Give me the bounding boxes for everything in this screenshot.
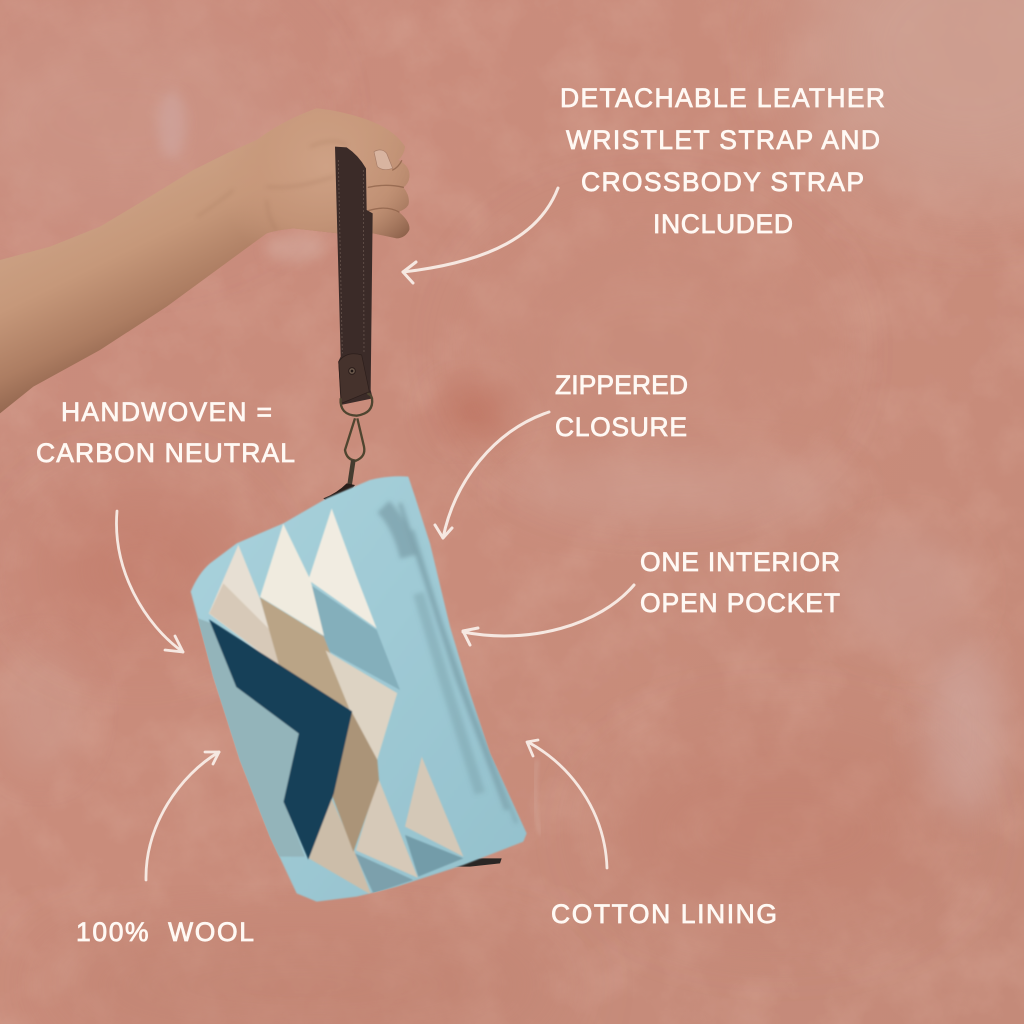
arrow: zippered closure <box>435 412 549 538</box>
arrow: wool <box>146 752 219 880</box>
label: handwoven carbon neutral: HANDWOVEN = <box>61 397 272 427</box>
label: detachable strap: DETACHABLE LEATHER <box>560 83 885 113</box>
metal clasp <box>341 394 372 487</box>
label: handwoven carbon neutral <box>36 397 295 468</box>
label: handwoven carbon neutral: CARBON NEUTRAL <box>36 438 295 468</box>
fingers <box>368 161 403 212</box>
side seam stripes <box>383 503 517 823</box>
label: zippered closure <box>555 370 688 442</box>
arrow: cotton lining <box>527 740 607 868</box>
label: detachable strap <box>560 83 885 239</box>
label: detachable strap: CROSSBODY STRAP <box>581 167 864 197</box>
label: zippered closure: ZIPPERED <box>555 370 688 400</box>
arrow: interior pocket <box>463 585 634 645</box>
label: cotton lining: COTTON LINING <box>551 899 777 929</box>
leather wrist strap <box>335 147 373 405</box>
label: detachable strap: INCLUDED <box>653 209 793 239</box>
label: interior pocket <box>640 547 840 618</box>
label: zippered closure: CLOSURE <box>555 412 687 442</box>
label: wool: 100% WOOL <box>76 917 254 947</box>
label: detachable strap: WRISTLET STRAP AND <box>566 125 880 155</box>
arrow: handwoven <box>116 511 183 652</box>
label: interior pocket: ONE INTERIOR <box>640 547 840 577</box>
arm and hand <box>0 108 409 487</box>
pouch pattern <box>193 503 517 893</box>
arrow: wristlet strap <box>403 188 558 283</box>
skin creases <box>197 141 347 230</box>
label: interior pocket: OPEN POCKET <box>640 588 840 618</box>
wool pouch <box>191 476 527 902</box>
